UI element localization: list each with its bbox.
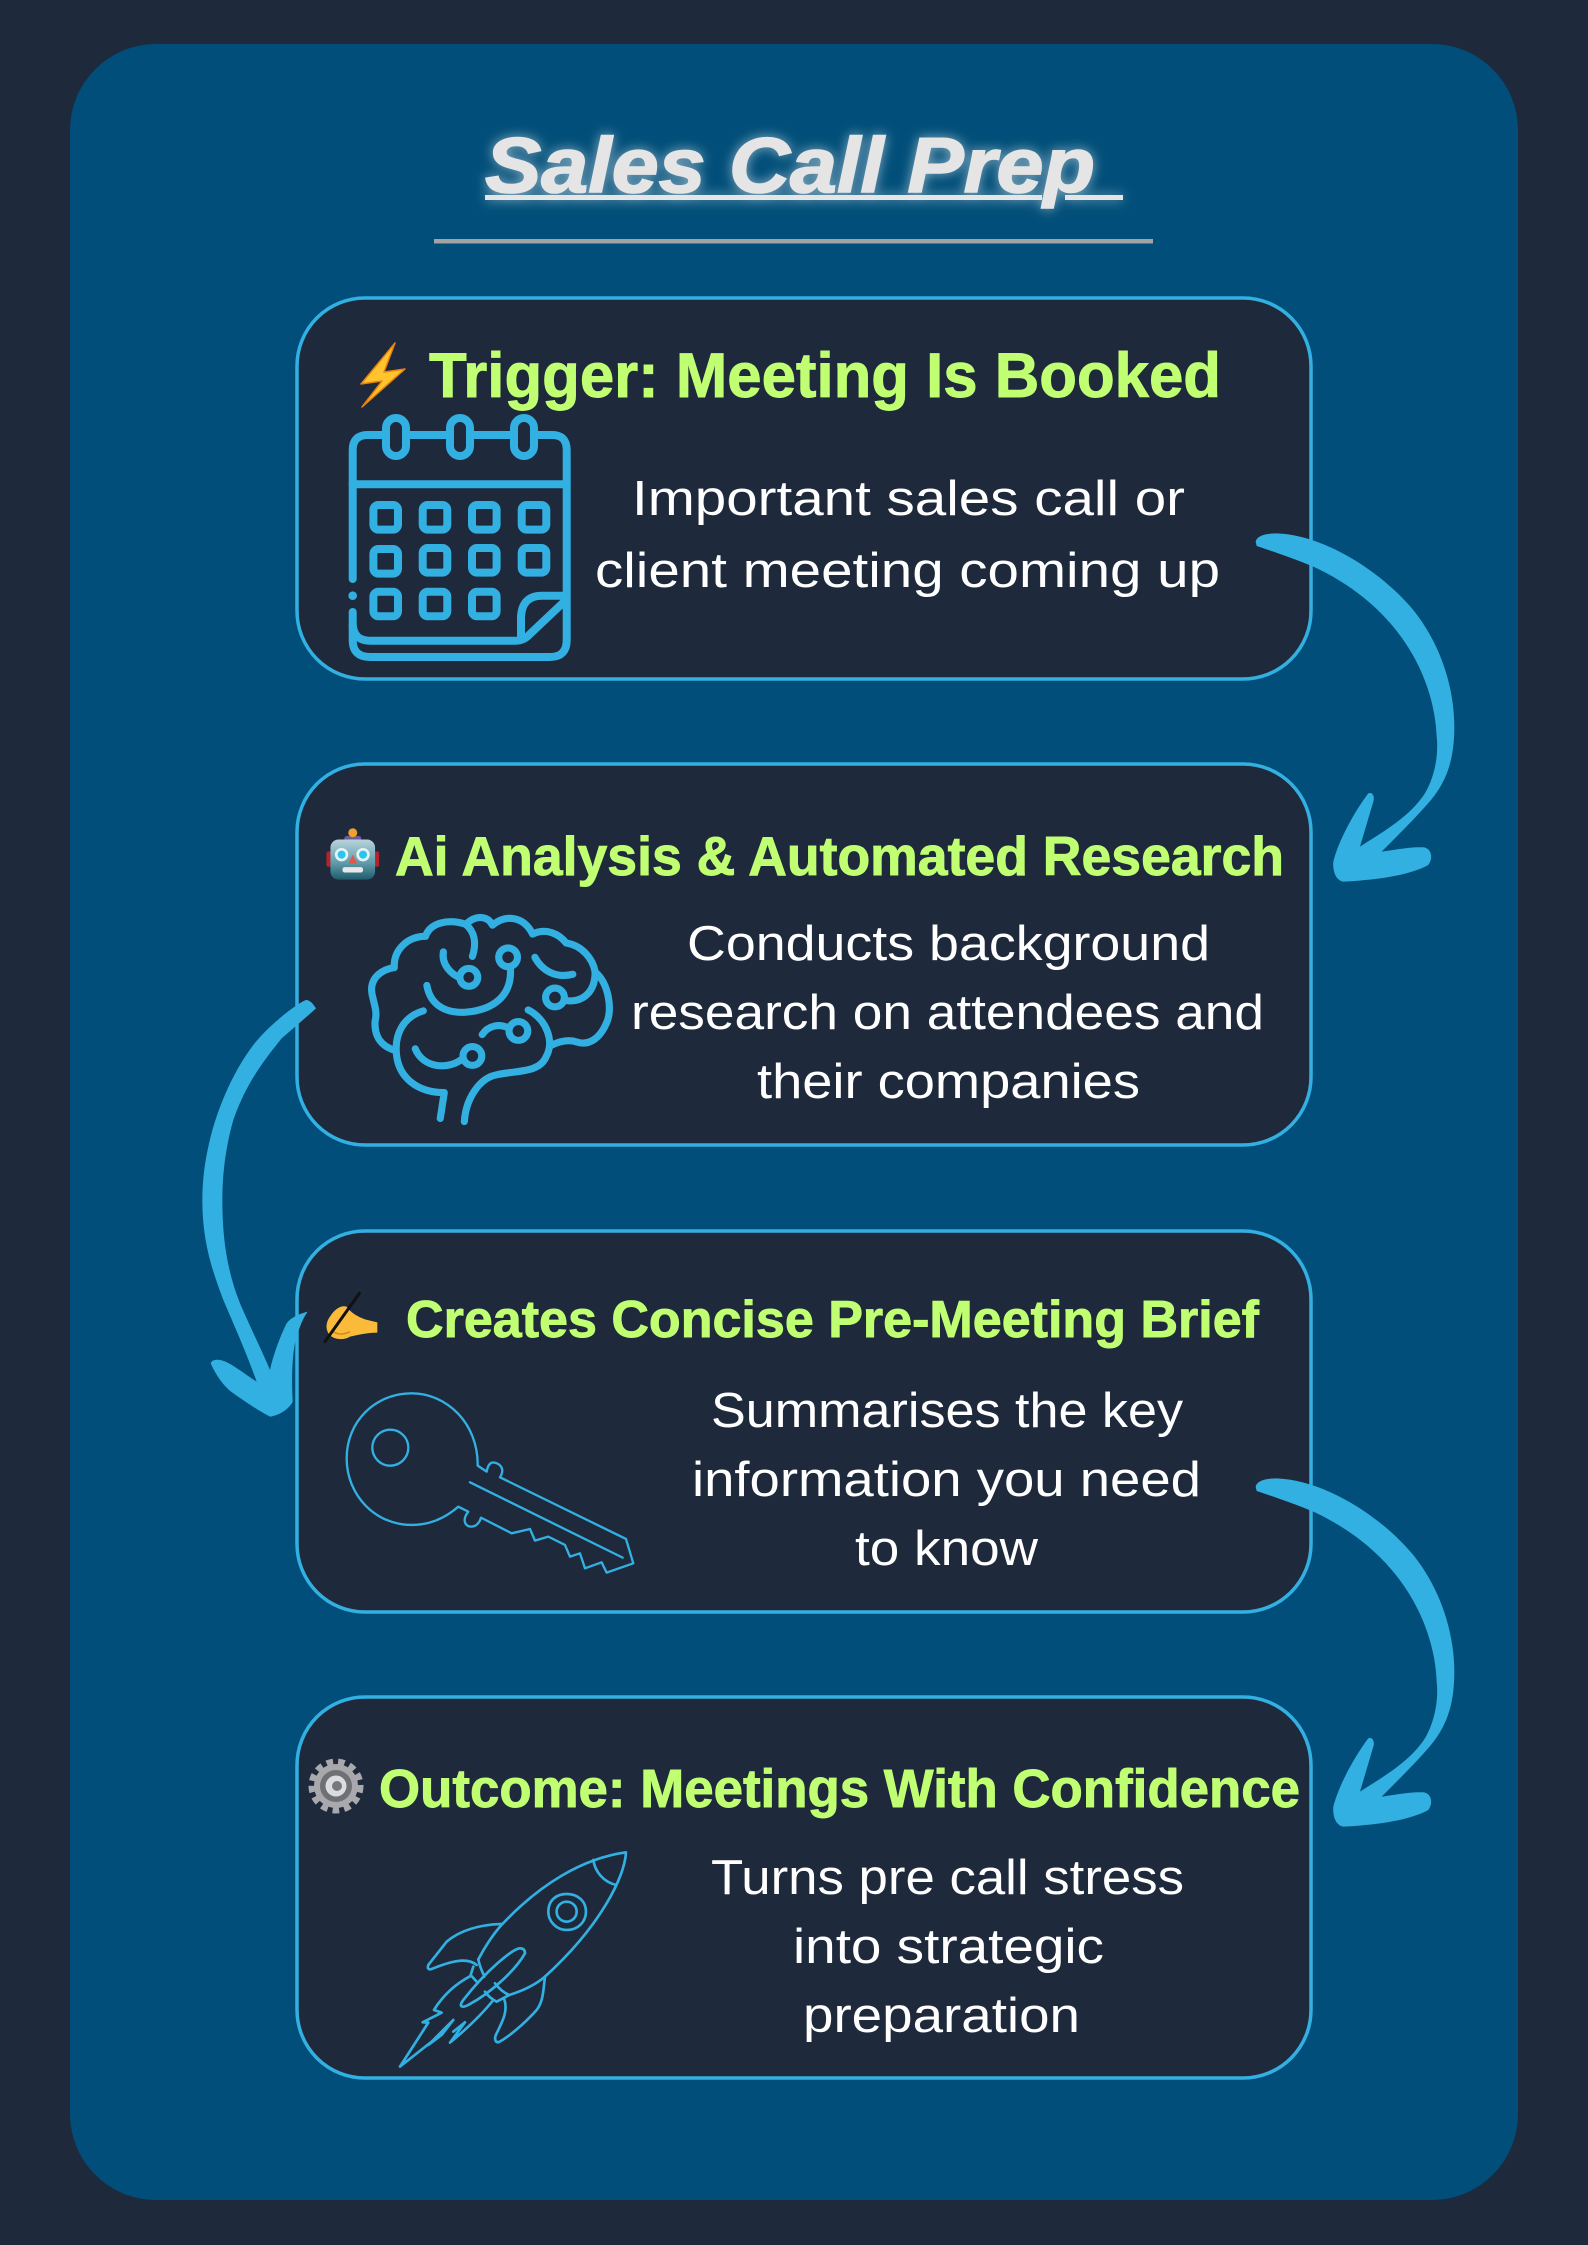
arrow: step 2 to step 3 <box>202 1000 316 1417</box>
icon: writing hand emoji <box>325 1293 377 1342</box>
heading: outcome: Outcome: Meetings With Confidence <box>379 1759 1300 1819</box>
panel: step 4 outcome <box>297 1697 1311 2078</box>
title divider <box>434 239 1153 244</box>
heading: ai analysis: Ai Analysis & Automated Research <box>395 825 1284 887</box>
text: ai analysis body: research on attendees and <box>631 986 1264 1040</box>
text: outcome body <box>711 1851 1184 2043</box>
title: Sales Call Prep <box>485 121 1095 209</box>
text: ai analysis body: their companies <box>757 1055 1140 1109</box>
icon: robot emoji <box>326 828 379 880</box>
text: trigger body: Important sales call or <box>632 472 1185 526</box>
panel: step 1 trigger <box>297 298 1311 679</box>
icon: lightning bolt <box>361 343 405 407</box>
text: brief body: information you need <box>692 1453 1201 1507</box>
icon: gear emoji <box>312 1762 360 1810</box>
arrow: step 3 to step 4 <box>1256 1478 1454 1827</box>
text: ai analysis body <box>631 917 1264 1109</box>
text: brief body <box>692 1384 1201 1576</box>
text: outcome body: Turns pre call stress <box>711 1851 1184 1905</box>
panel: step 2 ai analysis <box>297 764 1311 1145</box>
text: brief body: to know <box>855 1522 1039 1576</box>
icon: calendar <box>348 418 567 657</box>
icon: brain <box>372 917 609 1122</box>
panel: step 3 brief <box>297 1231 1311 1612</box>
heading: trigger: Trigger: Meeting Is Booked <box>429 341 1221 411</box>
text: outcome body: into strategic <box>793 1920 1104 1974</box>
arrow: step 1 to step 2 <box>1256 533 1454 882</box>
text: trigger body: client meeting coming up <box>595 544 1220 598</box>
text: brief body: Summarises the key <box>711 1384 1184 1438</box>
text: outcome body: preparation <box>803 1989 1080 2043</box>
text: ai analysis body: Conducts background <box>687 917 1210 971</box>
text: trigger body <box>595 472 1220 598</box>
icon: key <box>347 1393 633 1573</box>
heading: brief: Creates Concise Pre-Meeting Brief <box>406 1291 1260 1349</box>
icon: rocket <box>400 1852 626 2067</box>
